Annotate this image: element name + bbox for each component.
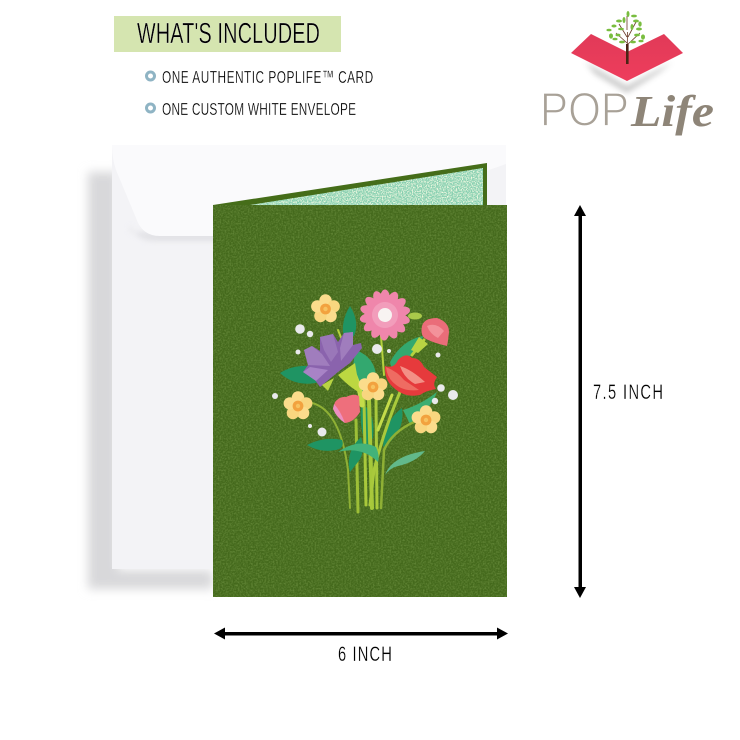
- label: height: 7.5 INCH: [593, 380, 663, 404]
- included item: card: ONE AUTHENTIC POPLIFE™ CARD: [162, 68, 373, 88]
- envelope flap: [112, 145, 506, 236]
- arrow: height: [574, 205, 586, 598]
- yellow flower: middle: [359, 372, 387, 400]
- infographic canvas: [84, 11, 713, 661]
- pink carnation: right: [411, 318, 449, 353]
- card back panel: [213, 163, 487, 207]
- included item: envelope: ONE CUSTOM WHITE ENVELOPE: [162, 100, 356, 120]
- logo wordmark Life: Life: [630, 87, 714, 136]
- yellow flower: left: [284, 391, 312, 419]
- logo wordmark POP: POP: [540, 82, 629, 136]
- leaves behind: [280, 306, 437, 447]
- card front: [213, 205, 507, 597]
- leaves in front: [307, 437, 425, 475]
- purple flower: [303, 332, 362, 387]
- pink tulip: [333, 395, 360, 423]
- logo tree: [606, 11, 645, 64]
- envelope: [112, 145, 506, 569]
- white dots: [272, 324, 458, 436]
- logo: PopLife: [540, 11, 714, 136]
- flower bouquet: [272, 289, 458, 512]
- logo open book: [571, 34, 683, 81]
- red flower: [385, 355, 437, 396]
- envelope flap shadow: [130, 225, 300, 241]
- heading: what's included: WHAT'S INCLUDED: [137, 18, 320, 50]
- stems: [312, 330, 424, 512]
- yellow flower: right: [412, 405, 440, 433]
- bud: green: [408, 312, 422, 320]
- green sepal: left: [322, 378, 334, 391]
- envelope shadow: [88, 172, 213, 589]
- yellow flower: top left: [311, 294, 340, 322]
- green sepal: right: [338, 363, 360, 393]
- daisy: pink: [359, 289, 411, 341]
- arrow: width: [214, 628, 508, 640]
- label: width: 6 INCH: [338, 642, 392, 666]
- logo shadow: [585, 62, 672, 93]
- card inner pattern: [250, 168, 483, 206]
